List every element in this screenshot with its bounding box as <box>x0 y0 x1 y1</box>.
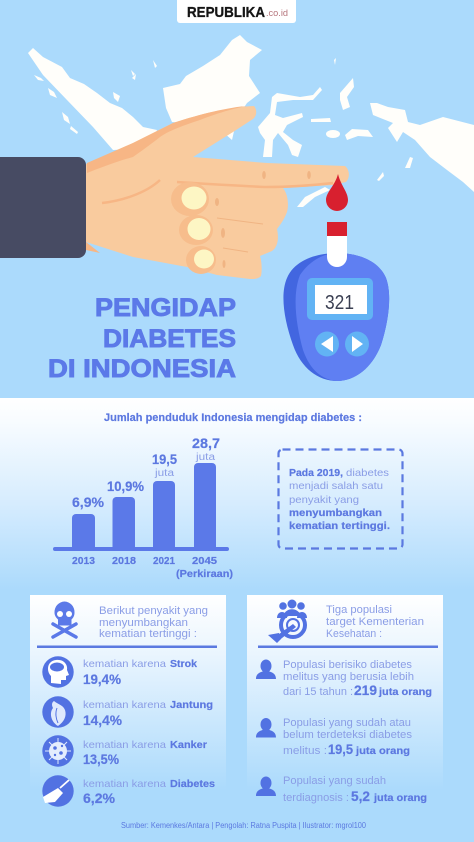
item: strok: 19,4% <box>83 672 121 687</box>
item: diabetes: kematian karena <box>83 778 166 790</box>
population 1: dari 15 tahun : <box>283 686 353 698</box>
population 3: juta orang <box>373 792 427 804</box>
callout: menjadi salah satu <box>289 480 383 492</box>
item: strok: kematian karena <box>83 658 166 670</box>
panel: causes of death <box>30 595 226 807</box>
item: jantung: 14,4% <box>83 713 122 728</box>
population 1: 219 <box>354 683 377 698</box>
callout: penyakit yang <box>289 494 359 506</box>
population 2: melitus : <box>283 745 327 757</box>
bar chart: 10,9% <box>107 478 145 494</box>
icon: heart <box>42 696 74 728</box>
logo: Republika: .co.id <box>266 8 288 19</box>
test strip <box>327 222 347 267</box>
meter display <box>307 278 373 320</box>
item: strok <box>83 658 197 687</box>
callout: diabetes <box>346 467 389 479</box>
item: jantung <box>83 699 213 728</box>
item: diabetes: Diabetes <box>170 778 215 790</box>
item: diabetes: 6,2% <box>83 791 115 806</box>
callout: Pada 2019, <box>289 467 343 479</box>
icon: skull and crossbones <box>53 602 76 637</box>
panel heading: Tiga populasi <box>326 604 392 616</box>
callout: menyumbangkan <box>289 507 382 519</box>
map of Indonesia <box>28 35 474 207</box>
bar chart: juta <box>154 468 175 479</box>
icon: target group <box>268 600 307 643</box>
icon: blood drop <box>326 174 348 211</box>
logo: Republika: REPUBLIKA <box>187 5 265 21</box>
logo: Republika <box>177 0 296 23</box>
glucose meter <box>283 222 389 381</box>
panel heading <box>99 605 208 640</box>
population 2: belum terdeteksi diabetes <box>283 729 413 741</box>
bar chart: 6,9% <box>72 494 105 510</box>
sleeve <box>0 157 86 258</box>
population 2: Populasi yang sudah atau <box>283 717 411 729</box>
bar chart <box>53 435 233 580</box>
item: jantung: kematian karena <box>83 699 166 711</box>
callout <box>278 450 402 548</box>
statistics band <box>0 398 474 590</box>
fingernails <box>171 182 216 274</box>
bar chart: (Perkiraan) <box>176 568 233 580</box>
bar chart: 28,7 <box>192 435 220 451</box>
panel heading <box>326 604 424 640</box>
title: PENGIDAP <box>95 294 236 322</box>
item: kanker <box>83 739 207 767</box>
bar chart: 2013 <box>72 555 95 567</box>
item: kanker: kematian karena <box>83 739 166 751</box>
population 2: juta orang <box>355 745 410 757</box>
bar chart: 2045 <box>192 555 217 567</box>
title: DI INDONESIA <box>48 355 236 383</box>
item: kanker: Kanker <box>170 739 207 751</box>
title <box>48 294 236 383</box>
icon: stroke <box>42 656 74 688</box>
title: DIABETES <box>103 325 236 353</box>
icon: cancer cell <box>42 735 74 767</box>
source credit: Sumber: Kemenkes/Antara | Pengolah: Ratna Puspita | Ilustrator: mgrol100 <box>121 821 366 830</box>
population 1: Populasi berisiko diabetes <box>283 659 412 671</box>
panel heading: Berikut penyakit yang <box>99 605 208 617</box>
meter buttons <box>315 332 369 356</box>
chart heading: Jumlah penduduk Indonesia mengidap diabetes : <box>104 412 362 424</box>
panel: target populations <box>247 595 443 804</box>
panel heading: target Kementerian <box>326 616 424 628</box>
population 3: 5,2 <box>351 789 370 804</box>
bar chart: juta <box>195 452 216 463</box>
item: strok: Strok <box>170 658 197 670</box>
population 3 <box>283 775 427 804</box>
panel heading: menyumbangkan <box>99 617 188 629</box>
item: kanker: 13,5% <box>83 752 119 767</box>
population 2: 19,5 <box>328 742 353 757</box>
population 3: Populasi yang sudah <box>283 775 386 787</box>
panel heading: kematian tertinggi : <box>99 628 197 640</box>
bar chart: 2018 <box>112 555 136 567</box>
meter display: 321 <box>325 292 354 314</box>
population 2 <box>283 717 413 757</box>
item: jantung: Jantung <box>170 699 213 711</box>
icon: person <box>256 718 276 738</box>
icon: person <box>256 776 276 796</box>
item: diabetes <box>83 778 215 806</box>
hand <box>86 106 349 279</box>
population 1: melitus yang berusia lebih <box>283 671 414 683</box>
icon: diabetes <box>42 775 74 807</box>
bar chart: 2021 <box>153 555 175 567</box>
panel heading: Kesehatan : <box>326 628 382 640</box>
icon: person <box>256 660 276 679</box>
population 1 <box>283 659 432 698</box>
population 1: juta orang <box>378 686 432 698</box>
callout: kematian tertinggi. <box>289 520 390 532</box>
population 3: terdiagnosis : <box>283 792 349 804</box>
bar chart: 19,5 <box>152 451 177 467</box>
